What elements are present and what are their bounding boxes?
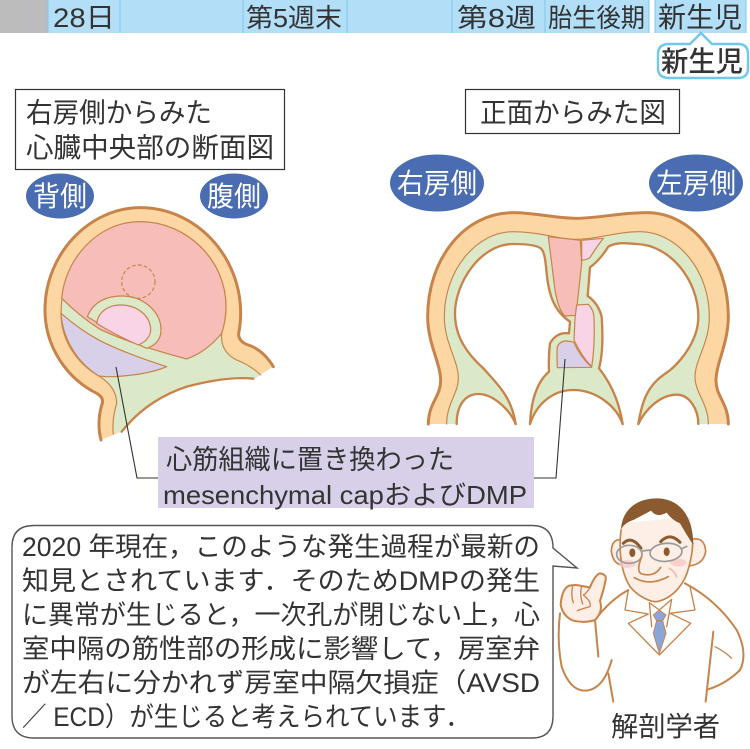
nose and mouth [634, 557, 677, 582]
leader lines [116, 359, 565, 478]
face [620, 517, 692, 602]
diagram: heart front view [428, 213, 728, 424]
blush [619, 559, 686, 568]
illustration: anatomist [559, 498, 743, 702]
label: ventral side: 腹側 [207, 181, 261, 212]
ears [611, 539, 706, 566]
body and coat [559, 583, 743, 702]
speech bubble: ／ ECD）が生じると考えられています． [22, 702, 470, 732]
ventricle arches [457, 390, 698, 424]
label: left atrium side: 左房側 [656, 168, 736, 199]
endocardial cushion ring [87, 296, 161, 348]
diagram: heart cross-section [45, 208, 273, 440]
speech bubble [12, 526, 577, 738]
label: dorsal side [26, 174, 94, 218]
callout: newborn: 新生児 [661, 46, 743, 77]
label: right atrium side: 右房側 [397, 168, 477, 199]
septum cavity: light pink top [582, 238, 603, 260]
timeline bar [0, 0, 746, 33]
septum cavity: light pink lower [574, 304, 594, 367]
heading: front view: 正面からみた図 [480, 97, 666, 128]
timeline bar: 新生児 [658, 2, 742, 33]
right atrium chamber [588, 243, 698, 424]
caption: anatomist: 解剖学者 [611, 711, 720, 742]
label: left atrium side [649, 154, 743, 212]
pointing hand [561, 573, 606, 622]
callout: myocardial tissue label: 心筋組織に置き換わった [166, 445, 454, 475]
glasses [617, 542, 687, 563]
speech bubble: が左右に分かれず房室中隔欠損症（AVSD [22, 668, 540, 698]
speech bubble: に異常が生じると，一次孔が閉じない上，心 [22, 600, 540, 630]
left atrium chamber [455, 244, 570, 424]
label: dorsal side: 背側 [33, 181, 87, 212]
callout: myocardial tissue label [158, 437, 534, 510]
foramen dashed circle [122, 265, 155, 298]
timeline bar: 第8週 [457, 3, 536, 33]
callout: newborn [658, 33, 748, 78]
mesenchymal cap region [61, 313, 167, 377]
timeline bar: 第5週末 [246, 3, 342, 33]
septum cavity: pink [548, 237, 582, 316]
speech bubble: 室中隔の筋性部の形成に影響して，房室弁 [22, 634, 540, 664]
timeline bar: 胎生後期 [548, 3, 645, 33]
heading: cross-section view from right atrium: 右房側からみた [26, 97, 212, 128]
eyes [629, 547, 670, 557]
label: ventral side [200, 174, 268, 218]
heading: cross-section view from right atrium: 心臓中央部の断面図 [26, 132, 274, 163]
heading: cross-section view from right atrium [16, 90, 284, 170]
eyebrows [623, 537, 680, 548]
right atrium cavity [62, 222, 226, 359]
callout: myocardial tissue label: mesenchymal capおよびDMP [163, 480, 527, 510]
label: right atrium side [390, 154, 484, 212]
heading: front view [466, 90, 680, 134]
hair [621, 498, 693, 545]
speech bubble: 知見とされています．そのためDMPの発生 [22, 566, 540, 596]
tie [653, 610, 666, 653]
dorsal mesenchymal protrusion [557, 341, 592, 368]
timeline bar: 28日 [53, 3, 115, 33]
speech bubble: 2020 年現在，このような発生過程が最新の [22, 532, 540, 562]
